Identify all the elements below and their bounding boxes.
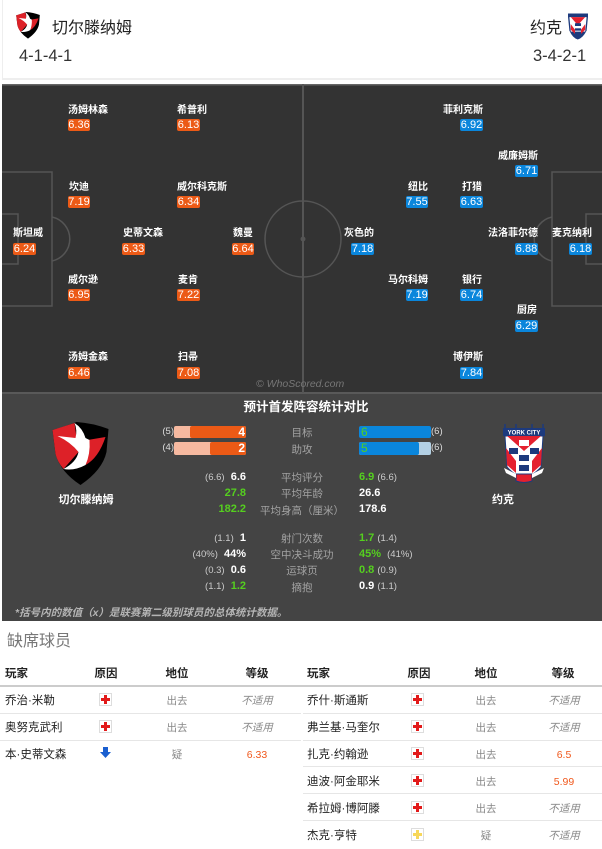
player: 威尔逊: 威尔逊	[68, 275, 98, 286]
away stat values: 1.7 (1.4)	[359, 532, 397, 544]
home stat values: 182.2	[218, 503, 246, 515]
player: 法洛菲尔德: 法洛菲尔德	[488, 228, 538, 239]
table: home missing players	[0, 667, 301, 761]
row: 奥努克武利	[5, 720, 274, 734]
row: 杰克·亨特: 不适用	[548, 830, 580, 842]
player: 希普利: 希普利	[177, 105, 207, 116]
away stat values: 6.9 (6.6)	[359, 471, 397, 483]
player: 银行: 6.74	[461, 289, 482, 301]
table: home missing players: 地位	[166, 668, 188, 680]
player: 坎迪: 7.19	[68, 196, 90, 208]
away stat values: 45% (41%)	[359, 548, 412, 560]
footnote: *括号内的数值（x）是联赛第二级别球员的总体统计数据。	[15, 607, 287, 619]
away stat values: 0.8 (0.9)	[359, 564, 397, 576]
player: 银行: 银行	[462, 275, 482, 286]
home team name: 切尔滕纳姆	[52, 20, 132, 37]
bar: home assists	[162, 441, 246, 455]
player: 坎迪: 坎迪	[69, 182, 89, 193]
row: 本·史蒂文森: 本·史蒂文森	[5, 749, 66, 761]
player: 汤姆林森	[68, 104, 108, 131]
row: 迪波·阿金耶米: 出去	[476, 776, 496, 788]
player: 威尔科克斯	[177, 181, 227, 208]
player: 扫帚: 扫帚	[178, 352, 198, 363]
player: 魏曼	[232, 227, 254, 255]
away team label: 约克	[492, 494, 514, 506]
player: 厨房: 厨房	[517, 305, 537, 316]
row: 弗兰基·马奎尔: 出去	[476, 722, 496, 734]
panel: match header	[2, 0, 602, 80]
stat labels: 目标	[292, 427, 312, 439]
player: 银行	[460, 274, 483, 301]
player: 扫帚: 7.08	[178, 367, 199, 379]
player: 威尔科克斯: 6.34	[178, 196, 199, 208]
bar: home goals: (5)	[162, 426, 174, 437]
player: 菲利克斯: 菲利克斯	[443, 105, 483, 116]
stat labels: 摘抱	[292, 582, 312, 594]
player: 打猎: 6.63	[461, 196, 482, 208]
player: 菲利克斯	[443, 104, 483, 131]
stat labels: 助攻	[292, 444, 312, 456]
player: 打猎	[460, 181, 483, 208]
stat labels: 平均年龄	[281, 488, 323, 500]
bar: home goals	[162, 425, 246, 439]
player: 马尔科姆: 7.19	[406, 289, 428, 301]
stat labels: 空中决斗成功	[270, 549, 334, 561]
player: 博伊斯	[453, 351, 483, 379]
stat labels: 射门次数	[281, 533, 323, 545]
icon: York crest small	[568, 14, 588, 40]
row: 乔什·斯通斯: 乔什·斯通斯	[307, 695, 368, 707]
row: 乔什·斯通斯	[301, 687, 602, 714]
player: 威廉姆斯: 6.71	[516, 165, 537, 177]
row: 乔治·米勒	[5, 693, 274, 707]
panel: lineup stats comparison	[2, 394, 602, 621]
away stat values: 178.6	[359, 503, 387, 515]
table: away missing players: 玩家	[307, 668, 330, 680]
row: 本·史蒂文森	[5, 747, 267, 761]
table: home missing players: 等级	[246, 668, 268, 680]
row: 乔什·斯通斯: 不适用	[548, 695, 580, 707]
row: 杰克·亨特	[301, 821, 602, 848]
bar: home goals: 4	[238, 425, 245, 439]
player: 纽比	[406, 181, 428, 208]
bar: home assists: 2	[238, 441, 245, 455]
player: 扫帚	[177, 351, 200, 379]
row: 迪波·阿金耶米: 5.99	[554, 776, 574, 788]
panel: pitch	[2, 84, 602, 394]
player: 马尔科姆: 马尔科姆	[388, 275, 428, 286]
player: 威廉姆斯	[498, 150, 538, 177]
row: 希拉姆·博阿滕: 出去	[476, 803, 496, 815]
player: 马尔科姆	[388, 274, 428, 301]
player: 菲利克斯: 6.92	[461, 119, 482, 131]
home stat values: (6.6) 6.6	[205, 471, 246, 483]
away team name: 约克	[530, 20, 562, 37]
row: 希拉姆·博阿滕: 希拉姆·博阿滕	[307, 803, 380, 815]
player: 麦克纳利	[552, 227, 592, 255]
player: 斯坦威	[13, 227, 43, 255]
icon: Cheltenham crest small	[16, 12, 40, 39]
home stat values: (1.1) 1	[214, 532, 246, 544]
table: home missing players: 原因	[94, 668, 118, 680]
row: 弗兰基·马奎尔: 弗兰基·马奎尔	[307, 722, 380, 734]
player: 魏曼: 6.64	[232, 243, 254, 255]
icon: York crest large	[503, 424, 545, 483]
bar: away assists: (6)	[431, 442, 443, 453]
home stat values	[193, 471, 246, 592]
stat labels: 平均身高（厘米）	[260, 505, 344, 517]
row: 扎克·约翰逊	[301, 741, 602, 767]
player: 魏曼: 魏曼	[233, 228, 253, 239]
icon: blue down arrow	[100, 747, 111, 758]
home stat values: 27.8	[225, 487, 246, 499]
bar: away goals	[359, 425, 443, 439]
player: 威廉姆斯: 威廉姆斯	[498, 151, 538, 162]
stat labels	[260, 427, 344, 594]
player: 麦肯: 麦肯	[178, 275, 198, 286]
player: 纽比: 纽比	[408, 182, 428, 193]
player: 灰色的: 7.18	[352, 243, 373, 255]
player: 威尔科克斯: 威尔科克斯	[177, 182, 227, 193]
home stat values: (40%) 44%	[193, 548, 246, 560]
player: 法洛菲尔德	[488, 227, 538, 255]
player: 史蒂文森: 6.33	[123, 243, 144, 255]
table: away missing players: 原因	[408, 668, 430, 680]
row: 弗兰基·马奎尔: 不适用	[548, 722, 580, 734]
row: 杰克·亨特: 杰克·亨特	[307, 830, 357, 842]
player: 打猎: 打猎	[462, 182, 482, 193]
player: 灰色的: 灰色的	[344, 228, 374, 239]
table: away missing players	[301, 667, 602, 842]
watermark: © WhoScored.com	[256, 378, 344, 390]
bar: away goals: 6	[361, 425, 368, 439]
player: 希普利: 6.13	[178, 119, 199, 131]
player: 灰色的	[344, 227, 374, 255]
player: 汤姆林森: 汤姆林森	[68, 105, 108, 116]
row: 迪波·阿金耶米: 迪波·阿金耶米	[307, 776, 380, 788]
player: 麦克纳利: 麦克纳利	[552, 228, 592, 239]
player: 史蒂文森	[122, 227, 163, 255]
row: 扎克·约翰逊: 出去	[476, 749, 496, 761]
row: 奥努克武利: 奥努克武利	[5, 722, 62, 734]
row: 乔什·斯通斯: 出去	[476, 695, 496, 707]
row: 希拉姆·博阿滕	[301, 794, 602, 821]
player: 法洛菲尔德: 6.88	[516, 243, 537, 255]
heading: missing players: 缺席球员	[7, 633, 71, 650]
stat labels: 运球页	[286, 565, 318, 577]
pitch markings	[2, 84, 602, 394]
away stat values: 26.6	[359, 487, 380, 499]
player: 汤姆金森	[68, 351, 108, 379]
player: 博伊斯: 博伊斯	[453, 352, 483, 363]
row: 乔治·米勒: 乔治·米勒	[5, 695, 55, 707]
row: 本·史蒂文森: 6.33	[247, 749, 267, 761]
stat labels: 平均评分	[281, 472, 323, 484]
row: 弗兰基·马奎尔	[301, 714, 602, 741]
table: home missing players: 玩家	[5, 668, 28, 680]
icon: Cheltenham crest large	[52, 422, 108, 485]
table: away missing players: 地位	[474, 668, 498, 680]
row: 扎克·约翰逊: 扎克·约翰逊	[307, 749, 368, 761]
player: 威尔逊: 6.95	[68, 289, 90, 301]
player: 汤姆林森: 6.36	[68, 119, 90, 131]
row: 奥努克武利: 不适用	[241, 722, 273, 734]
player: 汤姆金森: 6.46	[68, 367, 90, 379]
player: 麦克纳利: 6.18	[570, 243, 591, 255]
row: 奥努克武利: 出去	[166, 722, 188, 734]
bar: away assists	[359, 441, 443, 455]
player: 麦肯	[177, 274, 200, 301]
away stat values: 0.9 (1.1)	[359, 580, 397, 592]
home formation: 4-1-4-1	[19, 47, 72, 65]
row: 扎克·约翰逊: 6.5	[557, 749, 571, 761]
player: 厨房: 6.29	[516, 320, 537, 332]
table: away missing players: 等级	[552, 668, 574, 680]
player: 纽比: 7.55	[406, 196, 428, 208]
home stat values: (1.1) 1.2	[205, 580, 246, 592]
away stat values	[359, 471, 412, 592]
player: 坎迪	[68, 181, 90, 208]
stats title: 预计首发阵容统计对比	[243, 400, 368, 414]
away formation: 3-4-2-1	[533, 47, 586, 65]
player: 希普利	[177, 104, 207, 131]
player: 斯坦威: 6.24	[14, 243, 35, 255]
icon: York crest large: YORK CITY	[508, 430, 540, 436]
player: 威尔逊	[68, 274, 98, 301]
row: 本·史蒂文森: 疑	[172, 749, 182, 761]
row: 乔治·米勒: 不适用	[241, 695, 273, 707]
player: 博伊斯: 7.84	[461, 367, 482, 379]
bar: away goals: (6)	[431, 426, 443, 437]
player: 汤姆金森: 汤姆金森	[68, 352, 108, 363]
player: 麦肯: 7.22	[178, 289, 199, 301]
player: 斯坦威: 斯坦威	[13, 228, 43, 239]
home team label: 切尔滕纳姆	[58, 494, 114, 506]
row: 希拉姆·博阿滕: 不适用	[548, 803, 580, 815]
player: 史蒂文森: 史蒂文森	[123, 228, 163, 239]
bar: home assists: (4)	[162, 442, 174, 453]
row: 乔治·米勒: 出去	[166, 695, 188, 707]
row: 迪波·阿金耶米	[301, 767, 602, 794]
home stat values: (0.3) 0.6	[205, 564, 246, 576]
bar: away assists: 5	[361, 441, 368, 455]
player: 厨房	[515, 304, 538, 332]
row: 杰克·亨特: 疑	[481, 830, 491, 842]
